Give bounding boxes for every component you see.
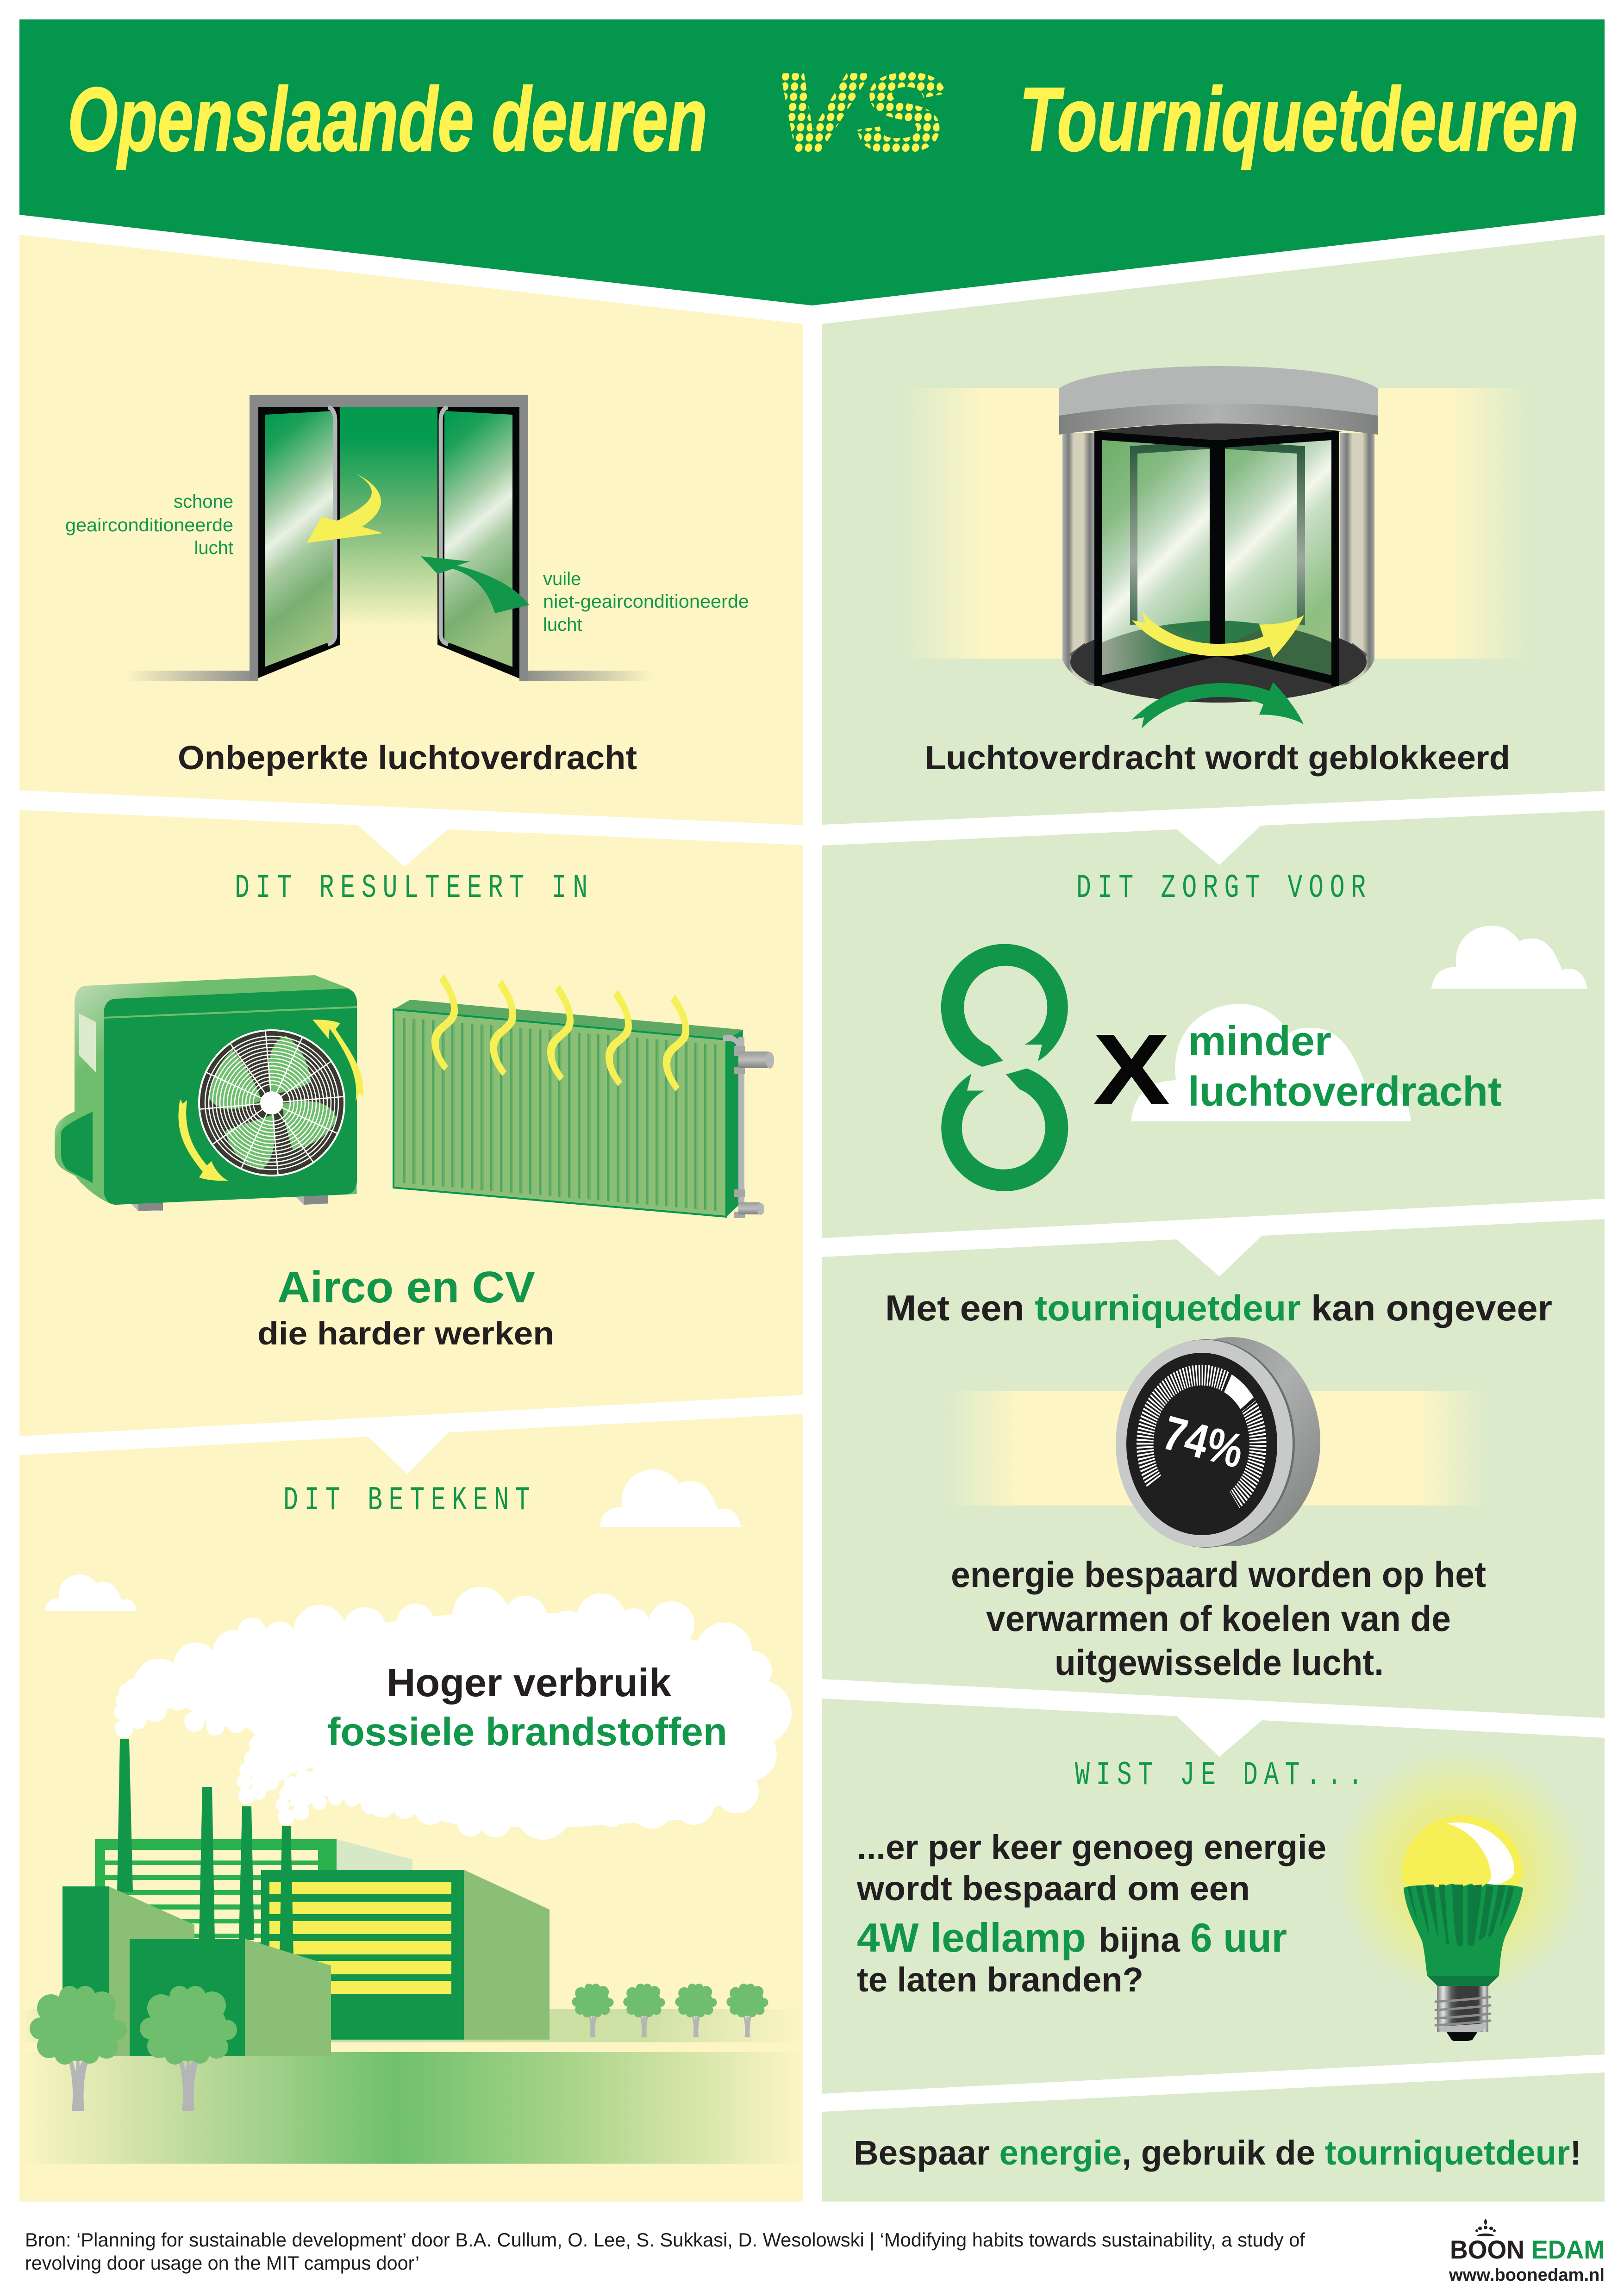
label: schone lucht <box>65 492 233 558</box>
text: airco en cv: die harder werken <box>257 1315 554 1351</box>
label: vuile lucht: niet-geairconditioneerde <box>543 591 749 612</box>
icon: large tree left <box>30 1986 127 2111</box>
text: fact: 4W ledlamp <box>857 1915 1086 1960</box>
icon: led bulb <box>1337 1748 1587 2041</box>
yellow band <box>945 1391 1490 1506</box>
source footnote: revolving door usage on the MIT campus door’ <box>25 2252 419 2274</box>
heading: WIST JE DAT... <box>1075 1757 1363 1795</box>
title: VS: VS <box>772 52 944 174</box>
arrow: clean air <box>307 473 383 543</box>
fan <box>193 1024 350 1182</box>
heading: DIT BETEKENT <box>283 1482 530 1520</box>
text: hoger verbruik: fossiele brandstoffen <box>327 1710 727 1754</box>
label: schone lucht: lucht <box>194 538 233 558</box>
arrow: fan rotation right <box>312 1020 363 1101</box>
icon: cloud right <box>600 1469 741 1527</box>
text: minder luchtoverdracht: minder <box>1188 1018 1331 1064</box>
arrow: dirty air <box>421 556 529 613</box>
text: intro: Met een tourniquetdeur kan ongeveer <box>885 1288 1552 1328</box>
icon: small trees <box>572 1984 768 2037</box>
icon: radiator <box>394 974 774 1218</box>
heading: DIT RESULTEERT IN <box>235 870 587 908</box>
wordmark: BOON EDAM <box>1450 2235 1605 2264</box>
icon: arrows forming number 8 <box>941 944 1068 1191</box>
source footnote: Bron: ‘Planning for sustainable development’ door B.A. Cullum, O. Lee, S. Sukkasi, D. Wesolowski | ‘Modifying habits towards sustainability, a study of <box>25 2229 1305 2251</box>
text: energy saving: verwarmen of koelen van de <box>986 1598 1451 1639</box>
title: Openslaande deuren: Openslaande deuren <box>68 69 707 170</box>
icon: factory <box>62 1739 550 2056</box>
text: energy saving: energie bespaard worden op het <box>951 1554 1486 1595</box>
text: energy saving <box>951 1554 1486 1683</box>
text: fact: 6 uur <box>1190 1915 1287 1960</box>
arrow: blocked air inside <box>1132 611 1304 658</box>
panel: fossiele brandstoffen <box>19 1414 803 2202</box>
text: fact: bijna <box>1099 1921 1181 1959</box>
icon: cloud left <box>44 1574 137 1611</box>
icon: swing doors <box>126 395 653 681</box>
source footnote <box>25 2229 1305 2274</box>
panel: wist je dat <box>822 1699 1605 2094</box>
caption: Luchtoverdracht wordt geblokkeerd <box>925 740 1510 777</box>
label: vuile lucht: lucht <box>543 615 582 635</box>
heat waves <box>431 974 689 1091</box>
text: hoger verbruik <box>327 1661 727 1754</box>
text: fact: ...er per keer genoeg energie <box>857 1828 1326 1867</box>
text: airco en cv <box>257 1263 554 1351</box>
header banner <box>19 19 1605 305</box>
multiply sign x: X <box>1093 1014 1170 1126</box>
ground <box>19 2052 803 2164</box>
panel: 8x minder luchtoverdracht <box>822 810 1605 1238</box>
icon: cloud behind text <box>1131 1004 1411 1121</box>
website: www.boonedam.nl <box>1449 2265 1605 2285</box>
text: fact: wordt bespaard om een <box>856 1869 1250 1908</box>
arrow: fan rotation left <box>178 1099 228 1181</box>
text: minder luchtoverdracht: luchtoverdracht <box>1188 1069 1502 1115</box>
icon: large tree right <box>140 1986 237 2111</box>
text: minder luchtoverdracht <box>1188 1018 1502 1115</box>
panel: luchtoverdracht geblokkeerd <box>822 235 1605 825</box>
label: vuile lucht: vuile <box>543 569 581 589</box>
canopy <box>1059 366 1378 435</box>
text: hoger verbruik: Hoger verbruik <box>387 1661 672 1705</box>
icon: revolving door <box>1059 366 1378 728</box>
text: fact <box>856 1828 1326 1999</box>
smoke cloud <box>114 1587 792 1840</box>
icon: air conditioning unit <box>55 975 363 1211</box>
panel: 74% energie <box>822 1219 1605 1718</box>
panel: call to action <box>822 2072 1605 2202</box>
icon: gauge dial <box>1116 1337 1320 1548</box>
text: airco en cv: Airco en CV <box>277 1263 535 1312</box>
text: energy saving: uitgewisselde lucht. <box>1055 1642 1384 1683</box>
text: fact: te laten branden? <box>857 1960 1143 1999</box>
heading: DIT ZORGT VOOR <box>1076 870 1366 908</box>
logo: boon edam <box>1449 2219 1605 2285</box>
text: bespaar energie: Bespaar energie, gebruik de tourniquetdeur! <box>854 2134 1581 2172</box>
yellow band <box>902 388 1533 659</box>
icon: crown <box>1475 2219 1496 2236</box>
arrow: air outside <box>1132 682 1304 728</box>
panel: airco en cv <box>19 810 803 1436</box>
label: schone lucht: schone <box>174 492 233 512</box>
value: 74%: 74% <box>1157 1406 1249 1479</box>
label: schone lucht: geairconditioneerde <box>65 515 233 535</box>
label: vuile lucht <box>543 569 749 635</box>
panel: onbeperkte luchtoverdracht <box>19 235 803 825</box>
ground strip <box>19 2009 803 2042</box>
icon: small cloud <box>1431 926 1587 989</box>
caption: Onbeperkte luchtoverdracht <box>178 740 637 777</box>
